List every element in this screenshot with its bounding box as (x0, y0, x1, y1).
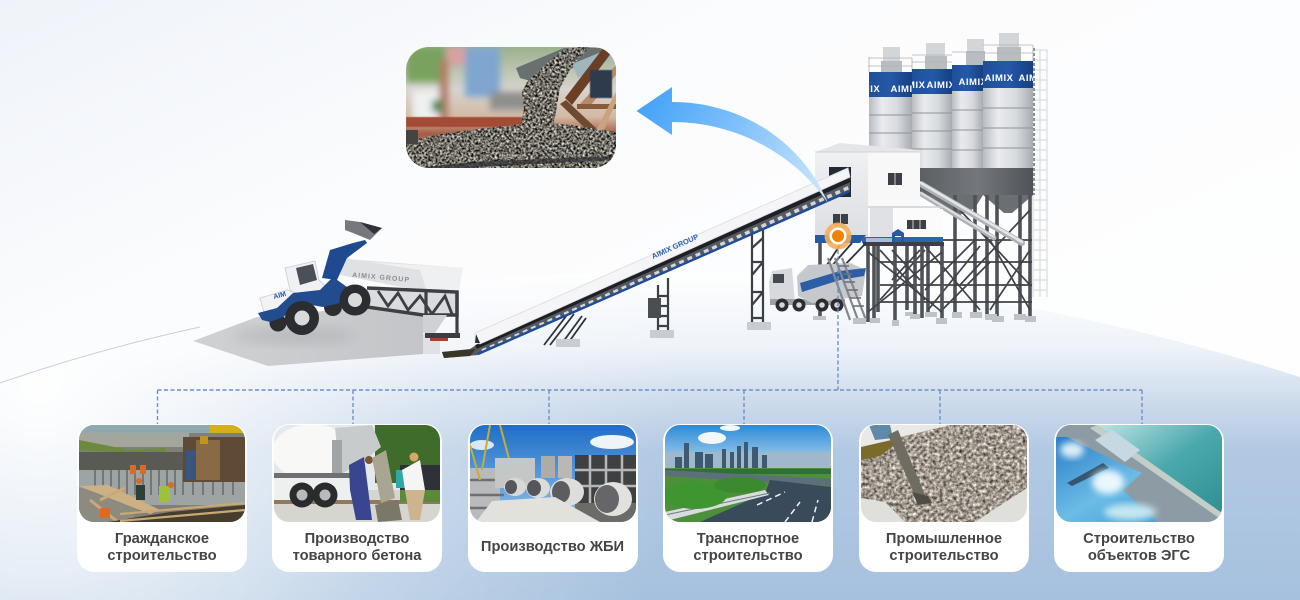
aggregate batcher and ramp (193, 220, 463, 366)
silo 3: AIMIX (959, 77, 988, 88)
application cards (77, 424, 1224, 572)
silo 3 (952, 39, 988, 170)
photo: construction site (79, 425, 245, 522)
card: industrial (859, 424, 1029, 572)
label: Строительство (1083, 531, 1195, 547)
photo: poured concrete (861, 425, 1027, 522)
screw conveyors (921, 183, 1022, 243)
silo cones (920, 168, 1033, 215)
stairs and front feet (813, 258, 947, 326)
card: civil construction (77, 424, 247, 572)
conveyor label: AIMIX GROUP (650, 232, 700, 261)
silo 2 (912, 43, 952, 168)
photo: pouring concrete (406, 47, 616, 170)
label: Промышленное (886, 531, 1002, 547)
aggregate batcher and ramp: AIMIX GROUP (352, 272, 410, 284)
silo 1: AIMIX (891, 84, 920, 95)
label: строительство (693, 548, 803, 564)
falling gravel (520, 47, 590, 130)
wheel loader (258, 220, 382, 335)
label: объектов ЭГС (1088, 548, 1191, 564)
silo 4: AIMIX (1019, 73, 1048, 84)
ground dome (0, 230, 1300, 600)
photo: precast yard (470, 425, 636, 522)
connector lines (158, 390, 1142, 424)
silo 1: MIX (862, 84, 880, 95)
silo support frame (878, 195, 1036, 322)
hopper body (340, 259, 463, 292)
scaffold and ladder tower (1033, 48, 1047, 297)
label: Транспортное (697, 531, 799, 547)
batching plant (769, 33, 1048, 326)
photo: dam (1056, 425, 1222, 522)
gravel pile (406, 123, 616, 168)
location marker (824, 222, 852, 250)
silo 2: AIMIX (897, 80, 926, 91)
ramp (193, 307, 423, 366)
label: Производство ЖБИ (481, 539, 624, 555)
silo 1 (868, 47, 912, 150)
mixer truck (769, 263, 866, 312)
hopper frame (367, 288, 457, 315)
wheelbarrow tray (516, 48, 608, 80)
silo 2: AIMIX (927, 80, 956, 91)
label: строительство (889, 548, 999, 564)
truss (442, 177, 850, 358)
photo: mixer truck pour (272, 424, 440, 522)
wheel loader: AIM (273, 291, 287, 301)
concrete block (423, 334, 440, 354)
card: precast (468, 424, 638, 572)
main tower building (815, 143, 943, 243)
conveyor supports (544, 230, 771, 347)
belt conveyor (442, 168, 850, 358)
card: ready-mix concrete (272, 424, 442, 572)
label: товарного бетона (293, 548, 422, 564)
card: hydro power (1054, 424, 1224, 572)
label: Производство (305, 531, 409, 547)
photo: highway and city (663, 425, 831, 522)
silo 4 (983, 33, 1034, 168)
label: Гражданское (115, 531, 209, 547)
arrow from plant to photo (636, 87, 828, 203)
plant legs and stairs (820, 242, 944, 322)
silo 4: AIMIX (985, 73, 1014, 84)
card: transport (663, 424, 833, 572)
label: строительство (107, 548, 217, 564)
belt cover (475, 168, 850, 344)
connector trunk (837, 250, 839, 390)
